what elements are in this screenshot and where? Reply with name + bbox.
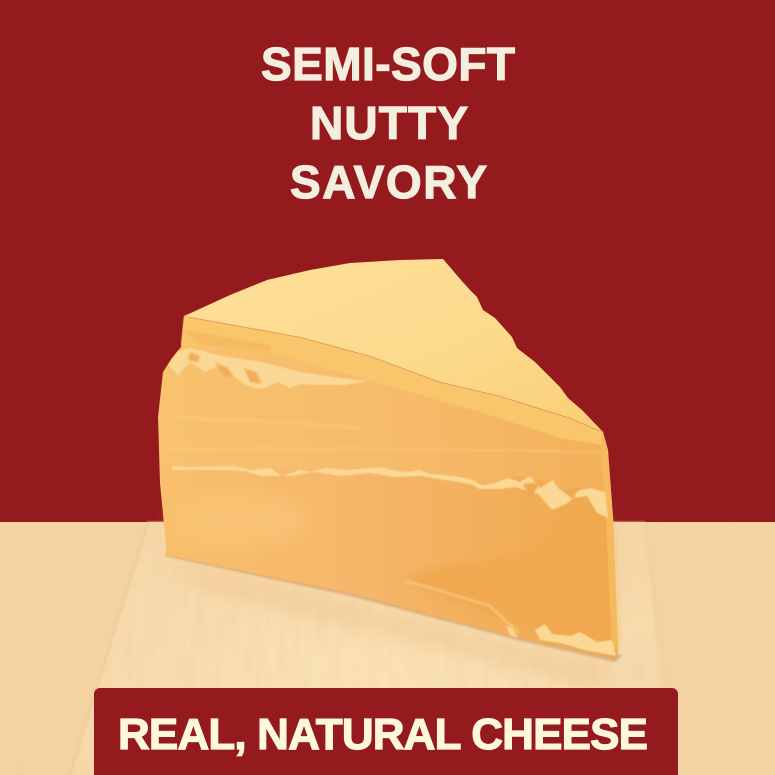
darker orange swirl on lower right [405, 518, 615, 650]
descriptor: savory: SAVORY [290, 156, 487, 208]
banner text: REAL, NATURAL CHEESE [118, 710, 648, 759]
middle fracture line [172, 466, 608, 518]
lower front layer [160, 463, 618, 658]
heading: cheese texture descriptors [261, 38, 515, 208]
top face [184, 259, 603, 432]
descriptor: nutty: NUTTY [310, 97, 468, 149]
banner: real, natural cheese [94, 688, 678, 775]
red background [0, 0, 775, 522]
lighter mottling on lower-left front [170, 492, 310, 548]
rim strip between top face and front [181, 316, 603, 445]
bottom corner crumbles [506, 624, 616, 656]
banner background [94, 688, 678, 775]
wedge contact shadow [165, 545, 622, 662]
descriptor: semi-soft: SEMI-SOFT [261, 38, 515, 90]
rim highlight [184, 330, 272, 352]
illustration: cheese wedge [158, 259, 622, 690]
top fracture crumbles [168, 348, 368, 389]
soft shadow on board [170, 560, 615, 690]
crumble shadows [188, 352, 262, 384]
right side rind [601, 432, 618, 650]
wooden cutting board [0, 522, 775, 775]
crease on lower right [405, 581, 518, 632]
faint horizontal creases on upper front [165, 418, 600, 452]
wedge body front face [158, 316, 618, 658]
fracture pits [523, 482, 576, 500]
